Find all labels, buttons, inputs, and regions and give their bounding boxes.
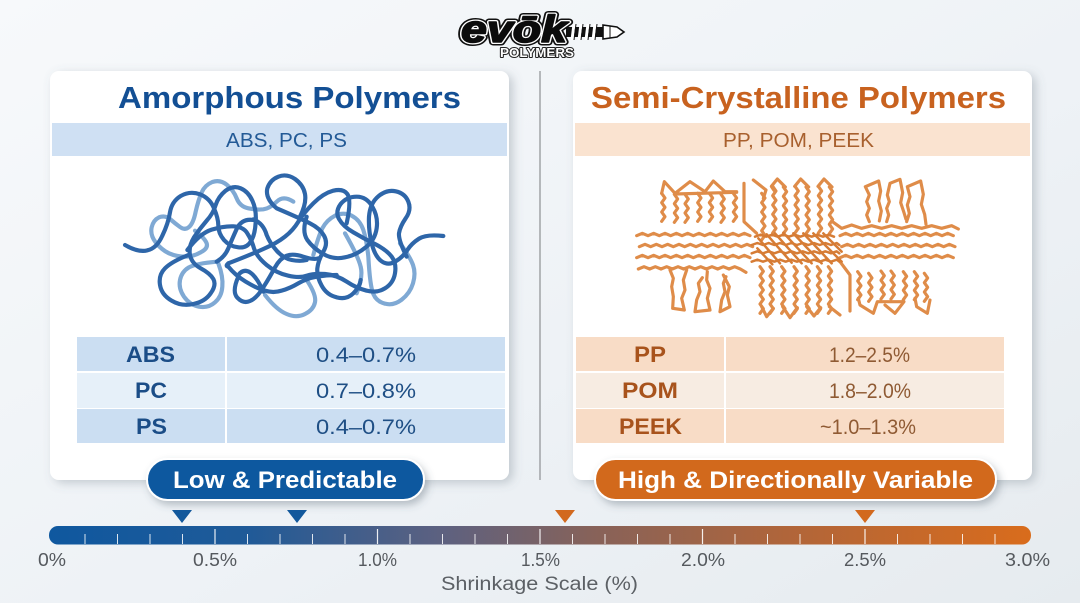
- marker: semi-crystalline high: [855, 510, 875, 523]
- shrinkage scale: [38, 510, 1050, 595]
- heading: semi-crystalline polymers: Semi-Crystalline Polymers: [591, 80, 1006, 115]
- marker: amorphous high: [287, 510, 307, 523]
- heading: amorphous polymers: Amorphous Polymers: [118, 80, 461, 115]
- row: POM: 1.8–2.0%: [829, 380, 911, 403]
- row: PC: 0.7–0.8%: [316, 380, 416, 403]
- callout: high and directionally variable: High & Directionally Variable: [618, 467, 973, 494]
- logo subtitle: POLYMERS: [500, 45, 574, 60]
- subtitle band: amorphous examples: [52, 123, 507, 156]
- callout: low and predictable: Low & Predictable: [173, 467, 397, 494]
- row: PC: [77, 373, 505, 408]
- callout: low and predictable: [147, 459, 424, 500]
- row: PEEK: PEEK: [619, 414, 682, 439]
- diagram: semi-crystalline chains: [637, 179, 958, 318]
- scale title: Shrinkage Scale (%): [441, 574, 638, 595]
- subtitle band: amorphous examples: ABS, PC, PS: [226, 130, 347, 152]
- row: PC: PC: [135, 378, 167, 403]
- table: semi-crystalline shrinkage: [576, 337, 1004, 443]
- panel: semi-crystalline polymers: [573, 71, 1032, 480]
- row: PEEK: [576, 409, 1004, 443]
- row: PP: PP: [634, 342, 666, 367]
- row: ABS: ABS: [126, 342, 175, 367]
- scale labels: [38, 550, 1050, 570]
- diagram: tangled amorphous chains: [125, 175, 443, 316]
- row: PP: 1.2–2.5%: [829, 344, 910, 367]
- panel: amorphous polymers: [50, 71, 509, 480]
- scale labels: 2.5%: [844, 550, 886, 570]
- scale labels: 2.0%: [681, 550, 725, 570]
- row: PEEK: ~1.0–1.3%: [820, 416, 916, 439]
- logo wordmark: evōk: [461, 9, 569, 51]
- logo wordmark: evōk: [461, 9, 569, 51]
- divider: [539, 71, 541, 480]
- marker: amorphous low: [172, 510, 192, 523]
- subtitle band: semi-crystalline examples: PP, POM, PEEK: [723, 130, 875, 152]
- callout: high and directionally variable: [595, 459, 996, 500]
- scale labels: 0%: [38, 550, 66, 570]
- row: ABS: [77, 337, 505, 371]
- scale labels: 1.5%: [521, 550, 560, 570]
- row: PS: PS: [136, 414, 167, 439]
- row: PS: [77, 409, 505, 443]
- scale labels: 3.0%: [1005, 550, 1050, 570]
- marker: semi-crystalline low: [555, 510, 575, 523]
- row: PP: [576, 337, 1004, 371]
- subtitle band: semi-crystalline examples: [575, 123, 1030, 156]
- row: PS: 0.4–0.7%: [316, 416, 416, 439]
- scale bar: [49, 526, 1031, 544]
- logo: evok polymers: [461, 9, 624, 60]
- row: POM: [576, 373, 1004, 408]
- scale labels: 0.5%: [193, 550, 237, 570]
- row: POM: POM: [622, 378, 678, 403]
- table: amorphous shrinkage: [77, 337, 505, 443]
- row: ABS: 0.4–0.7%: [316, 344, 416, 367]
- scale labels: 1.0%: [358, 550, 397, 570]
- icon: screw: [566, 24, 624, 40]
- logo wordmark: evōk: [461, 9, 569, 51]
